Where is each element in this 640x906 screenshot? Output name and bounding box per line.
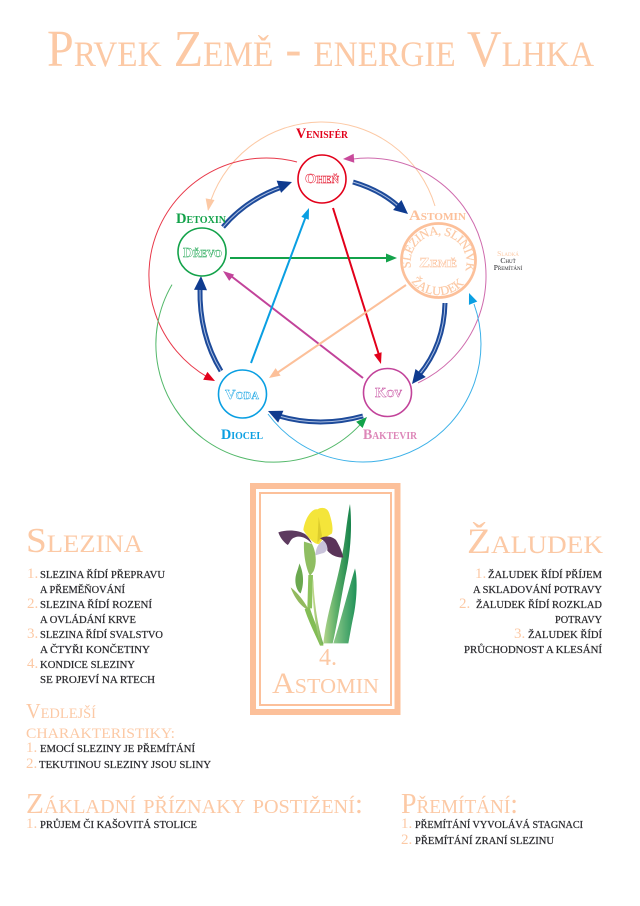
arrow: Země to Kov, double blue — [407, 303, 445, 388]
list: characteristics: 2. — [26, 756, 37, 772]
list: spleen functions: 2. — [27, 596, 38, 612]
list: pensiveness effects — [401, 816, 584, 848]
list: characteristics: EMOCÍ SLEZINY JE PŘEMÍTÁNÍ — [40, 743, 196, 755]
arrow: Oheň to Země, double blue — [353, 182, 412, 219]
list: spleen functions: 4. — [27, 656, 38, 672]
arc: green Dřevo to Kov — [156, 285, 370, 462]
label: Baktevir: Baktevir — [363, 427, 418, 443]
side note: taste and emotion: Přemítání — [494, 263, 523, 272]
node: Kov — [364, 368, 412, 416]
list: stomach functions: 1. — [475, 566, 486, 582]
list: stomach functions: 3. — [514, 626, 525, 642]
node: Oheň: Oheň — [305, 172, 340, 187]
list: stomach functions: PRŮCHODNOST A KLESÁNÍ — [464, 643, 603, 656]
list: spleen functions: A OVLÁDÁNÍ KRVE — [40, 614, 136, 626]
node: Dřevo — [178, 228, 226, 276]
arrow: Oheň to Kov — [333, 208, 385, 365]
list: symptoms — [26, 816, 197, 832]
list: spleen functions: SLEZINA ŘÍDÍ SVALSTVO — [40, 629, 163, 641]
arrow: Dřevo to Země — [230, 254, 397, 262]
list: stomach functions: ŽALUDEK ŘÍDÍ PŘÍJEM — [488, 569, 602, 581]
arrow: Země to Voda — [266, 285, 406, 382]
list: spleen functions: KONDICE SLEZINY — [40, 660, 136, 671]
card name: Astomin — [272, 667, 379, 700]
side note: taste and emotion: Sladká — [497, 249, 519, 258]
list: pensiveness effects: PŘEMÍTÁNÍ ZRANÍ SLEZINU — [415, 835, 555, 847]
title: Prvek Země - energie Vlhka — [47, 21, 594, 78]
node: Oheň — [298, 155, 346, 203]
list: spleen functions: A ČTYŘI KONČETINY — [40, 644, 151, 656]
diagram: five elements cycle — [148, 122, 523, 463]
arc: peach Astomin to Dřevo — [204, 122, 435, 212]
node: Dřevo: Dřevo — [183, 246, 222, 261]
list: characteristics — [26, 740, 212, 772]
list: spleen functions: A PŘEMĚŇOVÁNÍ — [40, 584, 126, 596]
list: stomach functions: ŽALUDEK ŘÍDÍ — [528, 629, 603, 641]
arc: blue Voda to Země — [268, 291, 481, 462]
list: stomach functions: POTRAVY — [555, 615, 603, 626]
arrow: Kov to Dřevo — [221, 268, 363, 378]
label: Venisfér: Venisfér — [296, 126, 349, 142]
arrow: Kov to Voda, double blue — [265, 405, 363, 423]
node: Země with organ ring: ŽALUDEK — [411, 276, 464, 296]
list: spleen functions: SE PROJEVÍ NA RTECH — [40, 674, 156, 686]
illustration: iris flower — [278, 504, 357, 646]
heading: Vedlejší charakteristiky: Vedlejší — [26, 699, 96, 723]
panel: secondary characteristics — [26, 699, 212, 772]
heading: Slezina: Slezina — [26, 521, 143, 560]
node: Kov: Kov — [375, 386, 403, 401]
panel: framed iris card — [253, 486, 398, 712]
node: Země with organ ring: Země — [419, 256, 457, 271]
side note: taste and emotion: Chuť — [500, 256, 516, 265]
list: characteristics: TEKUTINOU SLEZINY JSOU SLINY — [39, 760, 212, 771]
heading: Žaludek: Žaludek — [467, 521, 603, 561]
list: spleen functions: SLEZINA ŘÍDÍ ROZENÍ — [40, 599, 153, 611]
list: characteristics: 1. — [26, 740, 37, 756]
list: symptoms: 1. — [26, 816, 37, 832]
side note: taste and emotion — [494, 249, 523, 272]
card number: 4. — [319, 645, 337, 671]
list: stomach functions: A SKLADOVÁNÍ POTRAVY — [473, 584, 603, 596]
arrow: Voda to Dřevo, double blue — [194, 276, 221, 371]
list: stomach functions: 2. — [459, 596, 470, 612]
heading: Přemítání: Přemítání: — [401, 788, 518, 820]
list: pensiveness effects: PŘEMÍTÁNÍ VYVOLÁVÁ STAGNACI — [415, 819, 584, 831]
list: stomach functions — [459, 566, 603, 656]
arrow: Dřevo to Oheň, double blue — [223, 176, 294, 227]
arc: magenta Kov to Oheň — [343, 154, 486, 383]
list: symptoms: PRŮJEM ČI KAŠOVITÁ STOLICE — [40, 818, 197, 831]
node: Voda: Voda — [225, 388, 260, 403]
list: pensiveness effects: 2. — [401, 832, 412, 848]
heading: Vedlejší charakteristiky: CHARAKTERISTIKY: — [26, 726, 175, 742]
label: Astomin: Astomin — [409, 208, 467, 224]
list: stomach functions: ŽALUDEK ŘÍDÍ ROZKLAD — [476, 599, 602, 611]
list: pensiveness effects: 1. — [401, 816, 412, 832]
arrow: Voda to Oheň — [251, 207, 313, 363]
node: Země with organ ring — [400, 222, 477, 299]
heading: Vedlejší charakteristiky — [26, 699, 175, 742]
list: spleen functions: 3. — [27, 626, 38, 642]
arc: red Oheň to Voda — [149, 158, 297, 385]
panel: basic symptoms — [26, 788, 363, 832]
heading: Základní příznaky postižení: Základní příznaky postižení: — [26, 788, 363, 820]
list: spleen functions: SLEZINA ŘÍDÍ PŘEPRAVU — [40, 569, 166, 581]
list: spleen functions: 1. — [27, 566, 38, 582]
panel: Přemítání — [401, 788, 584, 848]
label: Diocel: Diocel — [221, 427, 263, 443]
list: spleen functions — [27, 566, 166, 686]
panel: Žaludek — [459, 521, 603, 656]
node: Voda — [218, 370, 266, 418]
panel: Slezina — [26, 521, 166, 686]
label: Detoxin: Detoxin — [176, 211, 227, 227]
